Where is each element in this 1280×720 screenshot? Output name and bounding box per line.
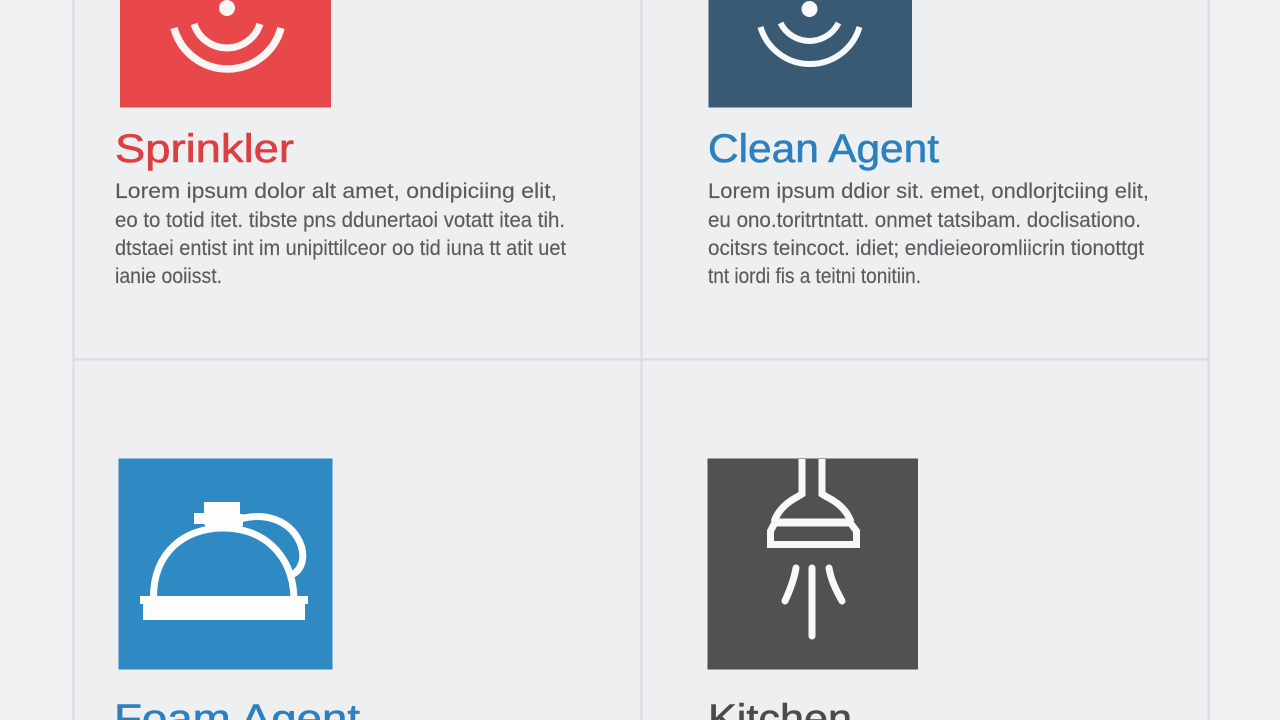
- text block: clean agent description: tnt iordi fis a teitni tonitiin.: [708, 265, 921, 288]
- text block: sprinkler description: [115, 180, 566, 288]
- heading: Sprinkler: Sprinkler: [115, 127, 294, 171]
- panel: sprinkler: [115, 0, 566, 288]
- text block: sprinkler description: eo to totid itet. tibste pns ddunertaoi votatt itea tih.: [115, 209, 565, 232]
- icon: clean agent: [708, 0, 912, 108]
- text block: clean agent description: ocitsrs teincoct. idiet; endieieoromliicrin tionottgt: [708, 237, 1144, 260]
- text block: sprinkler description: ianie ooiisst.: [115, 265, 222, 288]
- panel: clean agent: [708, 0, 1149, 288]
- text block: sprinkler description: dtstaei entist int im unipittilceor oo tid iuna tt atit uet: [115, 237, 566, 260]
- heading: Clean Agent: Clean Agent: [708, 127, 939, 171]
- text block: sprinkler description: Lorem ipsum dolor alt amet, ondipiciing elit,: [115, 180, 557, 203]
- icon: foam agent: [118, 458, 332, 670]
- icon: kitchen hood: [708, 458, 918, 670]
- icon: sprinkler: [120, 0, 331, 108]
- text block: clean agent description: eu ono.toritrtntatt. onmet tatsibam. doclisationo.: [708, 209, 1141, 232]
- panel: foam agent: [114, 458, 360, 720]
- text block: clean agent description: [708, 180, 1149, 288]
- panel: kitchen: [708, 458, 918, 720]
- text block: clean agent description: Lorem ipsum ddior sit. emet, ondlorjtciing elit,: [708, 180, 1149, 203]
